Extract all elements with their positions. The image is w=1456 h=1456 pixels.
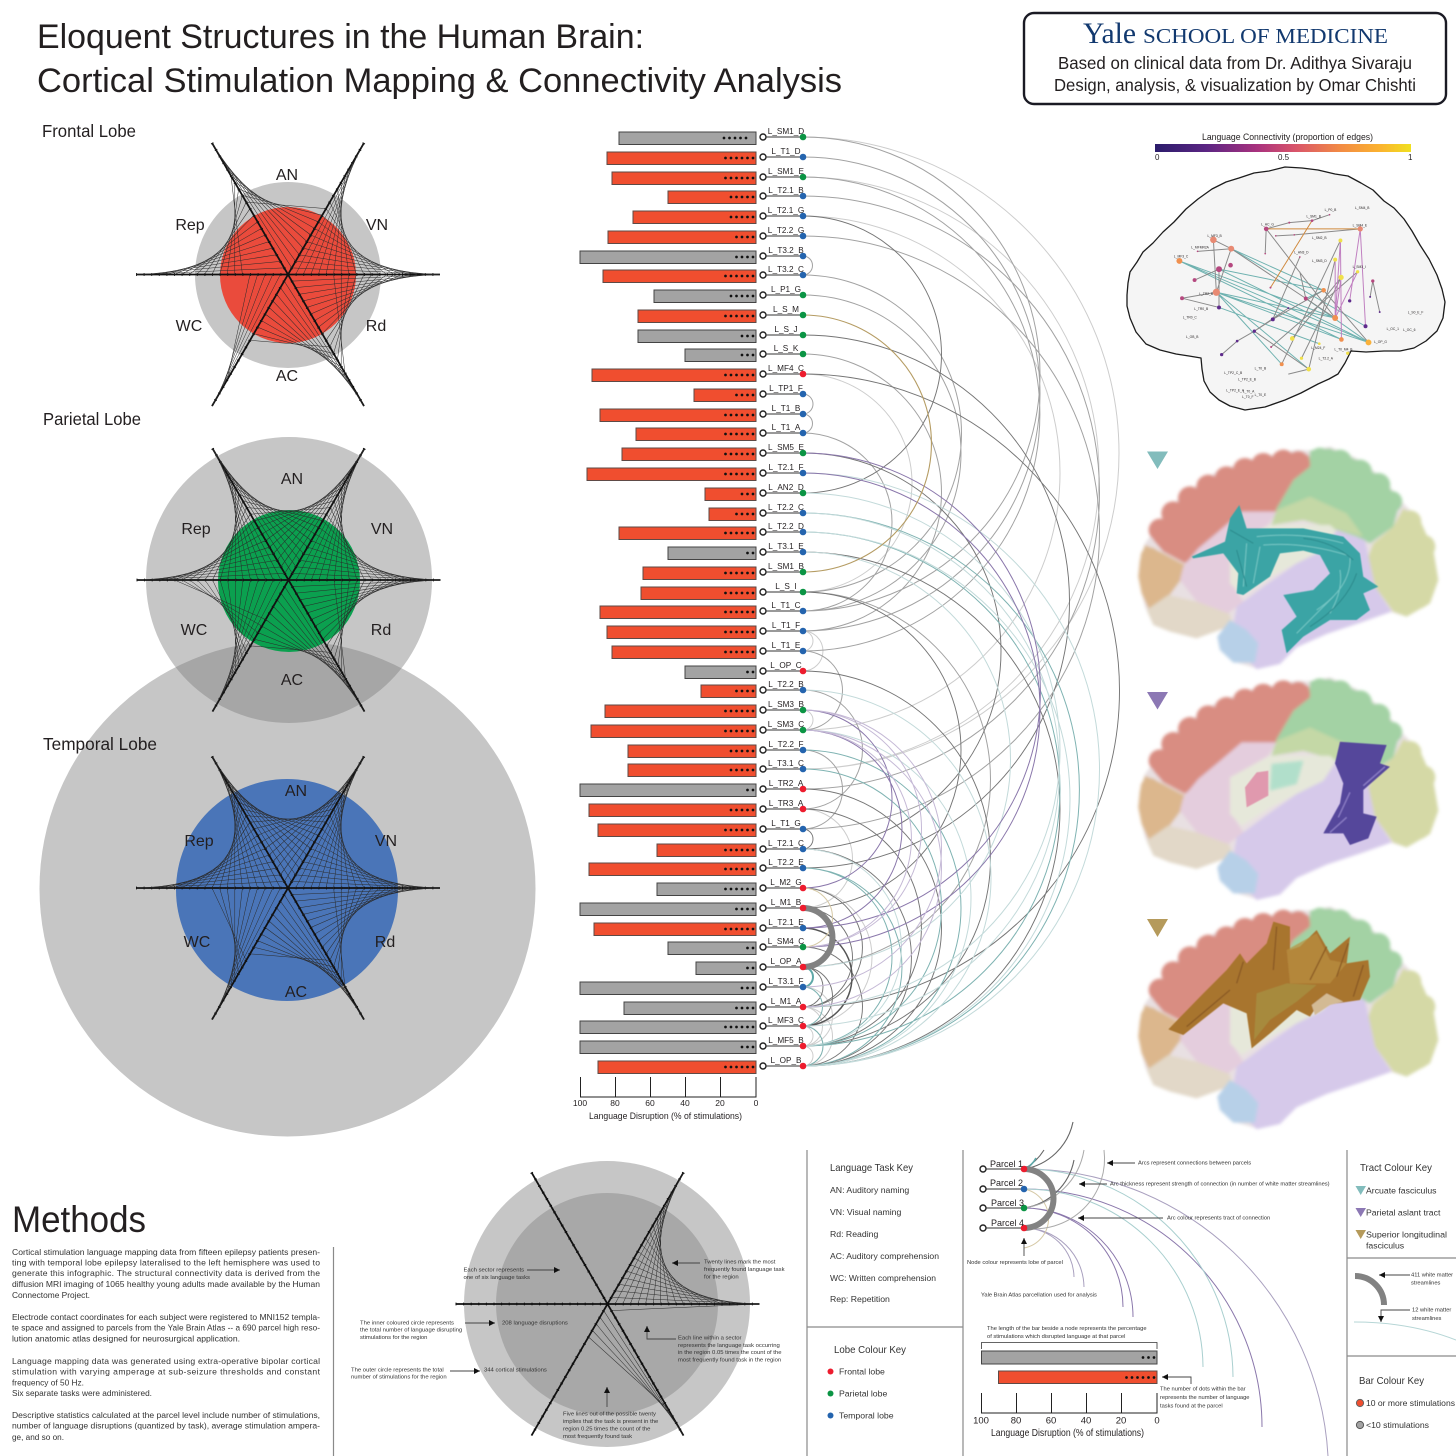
row: L_SM1_B [643, 562, 806, 580]
bar chart axis: 40 [680, 1098, 690, 1108]
credit box [1024, 13, 1446, 104]
row: L_SM1_D: L_SM1_D [768, 127, 804, 136]
credit box: Based on clinical data from Dr. Adithya Sivaraju [1058, 53, 1412, 73]
row: L_OP_C: L_OP_C [770, 661, 802, 670]
row: L_TR3_A [589, 799, 806, 816]
legend bar axis: 100 [973, 1416, 989, 1426]
wheel: parietal lobe: AN [281, 471, 303, 488]
bar chart axis: 60 [645, 1098, 655, 1108]
wheel: temporal lobe: AC [285, 984, 307, 1001]
arc thickness key: 411 white matter [1411, 1272, 1453, 1278]
row: L_P1_G [654, 285, 806, 302]
heading: temporal lobe: Temporal Lobe [43, 734, 157, 754]
wheel: frontal lobe: AN [276, 167, 298, 184]
row: L_TR3_A: L_TR3_A [769, 799, 804, 808]
row: L_T2.2_F: L_T2.2_F [768, 740, 804, 749]
wheel: parietal lobe [136, 437, 440, 723]
annotation: each line: Each line within a sector [678, 1336, 742, 1342]
row: L_S_I: L_S_I [775, 582, 797, 591]
bar colour key [1356, 1375, 1456, 1430]
row: L_OP_C [685, 661, 806, 678]
tract: superior longitudinal fasciculus [1168, 922, 1370, 1048]
methods text: Language mapping data was generated using extra-operative bipolar cortical [12, 1356, 320, 1366]
language task key [830, 1162, 939, 1304]
row: L_T2.1_B [668, 186, 806, 204]
row: L_T2.2_G [608, 226, 806, 244]
brain network: parcel connectivity: L_SM4_E [1353, 223, 1368, 227]
methods text: number of language disruptions (quantized by task), average stimulation ampera- [12, 1421, 320, 1431]
row: L_T1_F [607, 621, 806, 638]
methods text: Six separate tasks were administered. [12, 1388, 152, 1398]
bar chart axis: 100 [573, 1098, 587, 1108]
annotation: sector [464, 1268, 560, 1281]
language task key: Language Task Key [830, 1162, 914, 1174]
row: L_T1_F: L_T1_F [772, 621, 800, 630]
row: L_M2_G [657, 878, 806, 896]
brain network: parcel connectivity: L_SM4_B [1355, 206, 1370, 210]
credit box: Yale [1083, 17, 1136, 50]
bar chart axis: Language Disruption (% of stimulations) [589, 1111, 742, 1121]
row: L_OP_B: L_OP_B [771, 1056, 802, 1065]
colour bar: language connectivity: 0.5 [1278, 153, 1290, 162]
methods text: stimulation with varying amperage at sub-seizure thresholds and constant [12, 1367, 321, 1377]
row: L_MF3_C: L_MF3_C [768, 1016, 804, 1025]
annotation: outer circle [351, 1368, 547, 1380]
row: L_P1_G: L_P1_G [771, 285, 801, 294]
marker: superior longitudinal fasciculus [1147, 919, 1168, 937]
wheel: parietal lobe: Rep [181, 521, 211, 538]
row: L_T3.1_F [580, 977, 806, 994]
row: L_MF5_B: L_MF5_B [768, 1036, 804, 1045]
bar explanation: The number of dots within the bar [1160, 1386, 1246, 1392]
connectivity arcs [803, 137, 1120, 1066]
row: L_SM3_B [605, 700, 806, 718]
colour bar: language connectivity: 1 [1408, 153, 1413, 162]
annotation: inner circle: 208 language disruptions [502, 1320, 568, 1326]
annotations: arcs: Node colour represents lobe of parcel [967, 1260, 1063, 1266]
annotation: five lines: most frequently found task [563, 1434, 632, 1440]
heading: methods: Methods [12, 1199, 146, 1240]
row: L_S_I [641, 582, 806, 600]
brain network: parcel connectivity: L_TR2_B [1199, 292, 1214, 296]
title: Cortical Stimulation Mapping & Connectivity Analysis [37, 62, 842, 100]
row: L_T1_B: L_T1_B [772, 404, 801, 413]
legend bar axis: 0 [1154, 1416, 1160, 1426]
row: L_T1_A: L_T1_A [772, 423, 801, 432]
brain: superior longitudinal fasciculus [1138, 907, 1438, 1129]
annotation: inner circle: stimulations for the region [360, 1335, 427, 1341]
row: L_T3.1_C [628, 759, 806, 776]
row: L_MF5_B [580, 1036, 806, 1054]
wheel: frontal lobe: Rd [366, 318, 386, 335]
row: L_T1_A [636, 423, 806, 440]
bar explanation: The length of the bar beside a node represents the percentage [987, 1326, 1147, 1332]
row: L_M1_B: L_M1_B [771, 898, 802, 907]
row: L_AN2_D [705, 483, 806, 500]
brain network: parcel connectivity: L_T0_M4_B [1335, 348, 1353, 352]
brain network: parcel connectivity: L_T0_E [1255, 393, 1267, 397]
annotation: twenty lines: for the region [704, 1274, 739, 1280]
row: L_T2.2_B: L_T2.2_B [768, 680, 804, 689]
annotation: sector: Each sector represents [464, 1268, 524, 1274]
annotation: twenty lines [672, 1260, 785, 1280]
annotation: each line: represents the language task occurring [678, 1343, 780, 1349]
annotation: twenty lines: Twenty lines mark the most [704, 1260, 776, 1266]
row: L_TR2_A [580, 779, 806, 796]
row: L_S_K: L_S_K [774, 344, 799, 353]
row: L_TP1_F: L_TP1_F [769, 384, 803, 393]
row: L_T2.1_G: L_T2.1_G [768, 206, 804, 215]
annotation: each line: in the region 0.05 times the count of the [678, 1350, 782, 1356]
annotations: arcs: Arcs represent connections between parcels [1138, 1160, 1251, 1166]
methods text: diffusion MRI imaging of 1065 healthy young adults made available by the Human [12, 1279, 320, 1289]
annotation: five lines: Five lines out of the possible twenty [563, 1412, 656, 1418]
row: L_T2.2_B [701, 680, 806, 698]
brain network: parcel connectivity: L_SM3_I [1353, 265, 1366, 269]
brain network: parcel connectivity: L_TP2_E_B [1238, 378, 1257, 382]
legend wheel: how to read [351, 1161, 785, 1447]
parcel nodes: Parcel 2 [990, 1178, 1023, 1188]
row: L_T2.2_G: L_T2.2_G [768, 226, 804, 235]
bar explanation: represents the number of language [1160, 1395, 1250, 1401]
row: L_T3.2_B [580, 246, 806, 264]
parcel nodes: Parcel 1 [990, 1159, 1023, 1169]
wheel: temporal lobe: Rd [375, 934, 395, 951]
annotation: inner circle [360, 1320, 568, 1341]
bar colour key: <10 stimulations [1366, 1420, 1430, 1430]
row: L_SM1_E [612, 167, 806, 184]
row: L_AN2_D: L_AN2_D [768, 483, 804, 492]
language task key: Rep: Repetition [830, 1294, 890, 1304]
row: L_M1_A [624, 997, 806, 1014]
row: L_T1_E: L_T1_E [772, 641, 801, 650]
annotation: five lines: implies that the task is present in the [563, 1419, 659, 1425]
arc thickness key: streamlines [1411, 1280, 1441, 1286]
legend bar axis: 80 [1011, 1416, 1021, 1426]
row: L_T2.2_E: L_T2.2_E [768, 858, 804, 867]
wheel: temporal lobe: VN [375, 833, 397, 850]
row: L_T3.1_C: L_T3.1_C [768, 759, 804, 768]
bar colour key: 10 or more stimulations [1366, 1398, 1456, 1408]
tract colour key: fasciculus [1366, 1240, 1405, 1250]
row: L_T2.1_E [594, 918, 806, 936]
row: L_M2_G: L_M2_G [770, 878, 802, 887]
arc thickness key [1354, 1272, 1456, 1340]
row: L_T1_E [612, 641, 806, 658]
tract: arcuate fasciculus [1192, 505, 1378, 653]
lobe colour key: Lobe Colour Key [834, 1344, 907, 1356]
tract colour key: Superior longitudinal [1366, 1230, 1447, 1240]
colour bar: language connectivity: 0 [1155, 153, 1160, 162]
row: L_T3.2_B: L_T3.2_B [768, 246, 804, 255]
annotations: arcs: Arc colour represents tract of connection [1167, 1216, 1270, 1222]
brain network: parcel connectivity: L_TP2_E_A [1226, 388, 1245, 392]
row: L_T2.1_E: L_T2.1_E [768, 918, 804, 927]
bar chart axis: 0 [754, 1098, 759, 1108]
brain network: parcel connectivity: L_P0_B [1325, 208, 1337, 212]
wheel: parietal lobe: WC [181, 622, 207, 639]
legend bar axis: 60 [1046, 1416, 1056, 1426]
lobe colour key [828, 1344, 907, 1420]
arc thickness key: 12 white matter [1412, 1308, 1451, 1314]
row: L_S_M [638, 305, 806, 322]
row: L_T2.1_C: L_T2.1_C [768, 839, 804, 848]
row: L_T2.2_F [628, 740, 806, 758]
brain network: parcel connectivity: L_T2.2_A [1319, 356, 1334, 360]
row: L_MF4_C [592, 364, 806, 382]
tract colour key: Arcuate fasciculus [1366, 1186, 1437, 1196]
row: L_T3.1_E: L_T3.1_E [768, 542, 804, 551]
row: L_MF3_C [580, 1016, 806, 1034]
methods text: Connectome Project. [12, 1290, 90, 1300]
wheel: frontal lobe: WC [176, 318, 202, 335]
wheel: temporal lobe: Rep [184, 833, 214, 850]
annotation: each line [647, 1326, 782, 1364]
row: L_SM1_E: L_SM1_E [768, 167, 805, 176]
brain network: parcel connectivity: L_AN3_D [1294, 251, 1309, 255]
lobe colour key: Parietal lobe [839, 1388, 887, 1398]
brain network: parcel connectivity: L_T0_B [1255, 366, 1267, 370]
row: L_MF4_C: L_MF4_C [768, 364, 804, 373]
credit box: SCHOOL OF MEDICINE [1143, 24, 1388, 48]
methods text: Cortical stimulation language mapping data from fifteen epilepsy patients presen- [12, 1247, 320, 1257]
row: L_T1_D: L_T1_D [771, 147, 801, 156]
title [37, 18, 842, 100]
wheel: frontal lobe: AC [276, 368, 298, 385]
methods text [12, 1247, 321, 1442]
legend bar axis: 20 [1116, 1416, 1126, 1426]
lobe colour key: Frontal lobe [839, 1366, 885, 1376]
title: Eloquent Structures in the Human Brain: [37, 18, 644, 56]
row: L_SM1_D [619, 127, 806, 144]
marker: arcuate fasciculus [1147, 452, 1168, 469]
annotations: arcs: Yale Brain Atlas parcellation used for analysis [981, 1292, 1097, 1298]
marker: parietal aslant tract [1147, 692, 1168, 710]
legend bar axis [973, 1393, 1160, 1439]
row: L_SM3_C: L_SM3_C [768, 720, 804, 729]
wheel: parietal lobe: VN [371, 521, 393, 538]
row: L_T2.2_D [619, 522, 806, 540]
row: L_T3.1_E [668, 542, 806, 560]
row: L_OP_A: L_OP_A [771, 957, 802, 966]
row: L_S_K [685, 344, 806, 362]
language task key: Rd: Reading [830, 1229, 878, 1239]
brain network: parcel connectivity: L_M24_F [1311, 346, 1325, 350]
brain: parietal aslant tract [1138, 677, 1438, 900]
row: L_T2.1_B: L_T2.1_B [768, 186, 804, 195]
row: L_T2.1_G [633, 206, 806, 224]
brain network: parcel connectivity: L_TP2_C_B [1224, 371, 1243, 375]
bar explanation: of stimulations which disrupted language at that parcel [987, 1334, 1125, 1340]
tract colour key: Tract Colour Key [1360, 1162, 1433, 1174]
language task key: AC: Auditory comprehension [830, 1251, 939, 1261]
parcel nodes [980, 1159, 1027, 1231]
bar explanation: tasks found at the parcel [1160, 1404, 1223, 1410]
brain network: parcel connectivity: L_SM2_B [1312, 236, 1327, 240]
colour bar: language connectivity [1155, 132, 1413, 162]
brain: arcuate fasciculus [1138, 447, 1438, 669]
row: L_T2.2_C [709, 503, 806, 520]
language task key: AN: Auditory naming [830, 1185, 909, 1195]
row: L_SM5_E [622, 443, 806, 460]
brain network: parcel connectivity: L_AC_G [1261, 223, 1274, 227]
row: L_T2.1_F [587, 463, 806, 480]
bar chart axis: 80 [610, 1098, 620, 1108]
annotations: arcs [967, 1160, 1330, 1298]
row: L_T3.2_C: L_T3.2_C [768, 265, 804, 274]
row: L_SM4_C [668, 937, 806, 954]
brain network: parcel connectivity: L_T0_F [1242, 395, 1253, 399]
colour bar: language connectivity: Language Connectivity (proportion of edges) [1202, 132, 1373, 142]
annotation: sector: one of six language tasks [464, 1275, 530, 1281]
row: L_SM4_C: L_SM4_C [768, 937, 804, 946]
bar chart: parcels with language disruption [580, 127, 806, 1074]
heading: parietal lobe: Parietal Lobe [43, 409, 141, 429]
wheel: temporal lobe: WC [184, 934, 210, 951]
credit box: Design, analysis, & visualization by Omar Chishti [1054, 75, 1416, 95]
row: L_M1_A: L_M1_A [771, 997, 802, 1006]
bar chart axis: 20 [715, 1098, 725, 1108]
brain network: parcel connectivity: L_OC_1 [1387, 327, 1399, 331]
bar colour key: Bar Colour Key [1359, 1375, 1425, 1387]
lobe colour key: Temporal lobe [839, 1410, 894, 1420]
brain network: parcel connectivity: L_OP_G [1374, 340, 1387, 344]
row: L_T2.2_D: L_T2.2_D [768, 522, 804, 531]
annotation: inner circle: The inner coloured circle represents [360, 1320, 454, 1326]
brain network: parcel connectivity: L_MF3_B [1207, 234, 1223, 238]
brain network: parcel connectivity: L_TR0_B [1194, 307, 1209, 311]
brain network: parcel connectivity: L_TR0_C [1183, 316, 1197, 320]
tract colour key [1356, 1162, 1447, 1250]
wheel: frontal lobe [117, 143, 459, 406]
methods text: Electrode contact coordinates for each subject were registered to MNI152 templa- [12, 1312, 320, 1322]
wheel: temporal lobe: AN [285, 783, 307, 800]
brain network: parcel connectivity: L_MFMR2A [1191, 246, 1210, 250]
row: L_T1_G [598, 819, 806, 836]
wheel: frontal lobe: VN [366, 217, 388, 234]
brain network: parcel connectivity: L_MF3_C [1174, 255, 1189, 259]
row: L_SM3_B: L_SM3_B [768, 700, 805, 709]
brain network: parcel connectivity: L_SM1_B [1306, 214, 1322, 218]
row: L_T1_G: L_T1_G [771, 819, 801, 828]
annotation: twenty lines: frequently found language task [704, 1267, 785, 1273]
brain network: parcel connectivity: L_SM3_D [1312, 259, 1327, 263]
row: L_T2.1_C [657, 839, 806, 856]
row: L_S_J: L_S_J [774, 325, 798, 334]
row: L_T1_C [600, 601, 806, 618]
row: L_SM5_E: L_SM5_E [768, 443, 805, 452]
wheel: parietal lobe: AC [281, 672, 303, 689]
arc diagram legend [967, 1122, 1330, 1456]
annotations: arcs: Arc thickness represent strength of connection (in number of white matter streamlines) [1110, 1182, 1330, 1188]
annotation: five lines [563, 1387, 659, 1440]
annotation: outer circle: The outer circle represents the total [351, 1368, 444, 1374]
brain network: parcel connectivity [1127, 167, 1445, 410]
brain network: parcel connectivity: L_OB_B [1186, 335, 1199, 339]
row: L_TP1_F [694, 384, 806, 402]
wheel: temporal lobe [40, 640, 536, 1136]
methods text: Descriptive statistics calculated at the parcel level include number of stimulations, [12, 1410, 320, 1420]
brain network: parcel connectivity: L_T0_A [1243, 390, 1255, 394]
brain network: parcel connectivity: L_S0_E_F [1408, 310, 1423, 314]
row: L_T2.1_F: L_T2.1_F [768, 463, 804, 472]
language task key: WC: Written comprehension [830, 1273, 936, 1283]
legend bar axis: Language Disruption (% of stimulations) [991, 1428, 1144, 1439]
wheel: parietal lobe: Rd [371, 622, 391, 639]
row: L_T1_B [600, 404, 806, 422]
row: L_OP_B [598, 1056, 806, 1074]
row: L_T2.2_C: L_T2.2_C [768, 503, 804, 512]
methods text: te space and assigned to parcels from the Yale Brain Atlas -- a 690 parcel high reso- [12, 1323, 320, 1333]
legend bar axis: 40 [1081, 1416, 1091, 1426]
row: L_OP_A [696, 957, 806, 974]
parcel nodes: Parcel 4 [991, 1218, 1024, 1228]
methods text: frequency of 50 Hz. [12, 1378, 84, 1388]
annotation: five lines: region 0.25 times the count of the [563, 1426, 651, 1432]
row: L_SM1_B: L_SM1_B [768, 562, 805, 571]
bar chart axis [573, 1077, 759, 1121]
methods text: ge, and so on. [12, 1432, 64, 1442]
annotation: each line: most frequently found task in the region [678, 1358, 781, 1364]
row: L_T1_D [607, 147, 806, 164]
row: L_SM3_C [591, 720, 806, 738]
annotation: outer circle: number of stimulations for the region [351, 1374, 447, 1380]
row: L_S_M: L_S_M [773, 305, 799, 314]
annotation: inner circle: the total number of language disrupting [360, 1328, 462, 1334]
row: L_TR2_A: L_TR2_A [769, 779, 804, 788]
row: L_T3.1_F: L_T3.1_F [768, 977, 804, 986]
row: L_T3.2_C [603, 265, 806, 282]
methods text: generate this infographic. The structural connectivity data is derived from the [12, 1268, 320, 1278]
row: L_T1_C: L_T1_C [771, 601, 801, 610]
wheel: frontal lobe: Rep [175, 217, 205, 234]
row: L_M1_B [580, 898, 806, 916]
row: L_S_J [638, 325, 806, 342]
methods text: lution anatomic atlas designed for neurosurgical application. [12, 1334, 240, 1344]
language task key: VN: Visual naming [830, 1207, 901, 1217]
arc thickness key: streamlines [1412, 1316, 1442, 1322]
parcel nodes: Parcel 3 [991, 1198, 1024, 1208]
row: L_T2.2_E [589, 858, 806, 876]
tract colour key: Parietal aslant tract [1366, 1208, 1441, 1218]
brain network: parcel connectivity: L_OC_6 [1403, 328, 1416, 332]
methods text: ting with temporal lobe epilepsy lateralised to the left hemisphere was used to [12, 1258, 320, 1268]
annotation: outer circle: 344 cortical stimulations [484, 1368, 547, 1374]
tract: parietal aslant [1323, 742, 1390, 845]
heading: frontal lobe: Frontal Lobe [42, 121, 136, 141]
bar explanation [982, 1326, 1250, 1410]
